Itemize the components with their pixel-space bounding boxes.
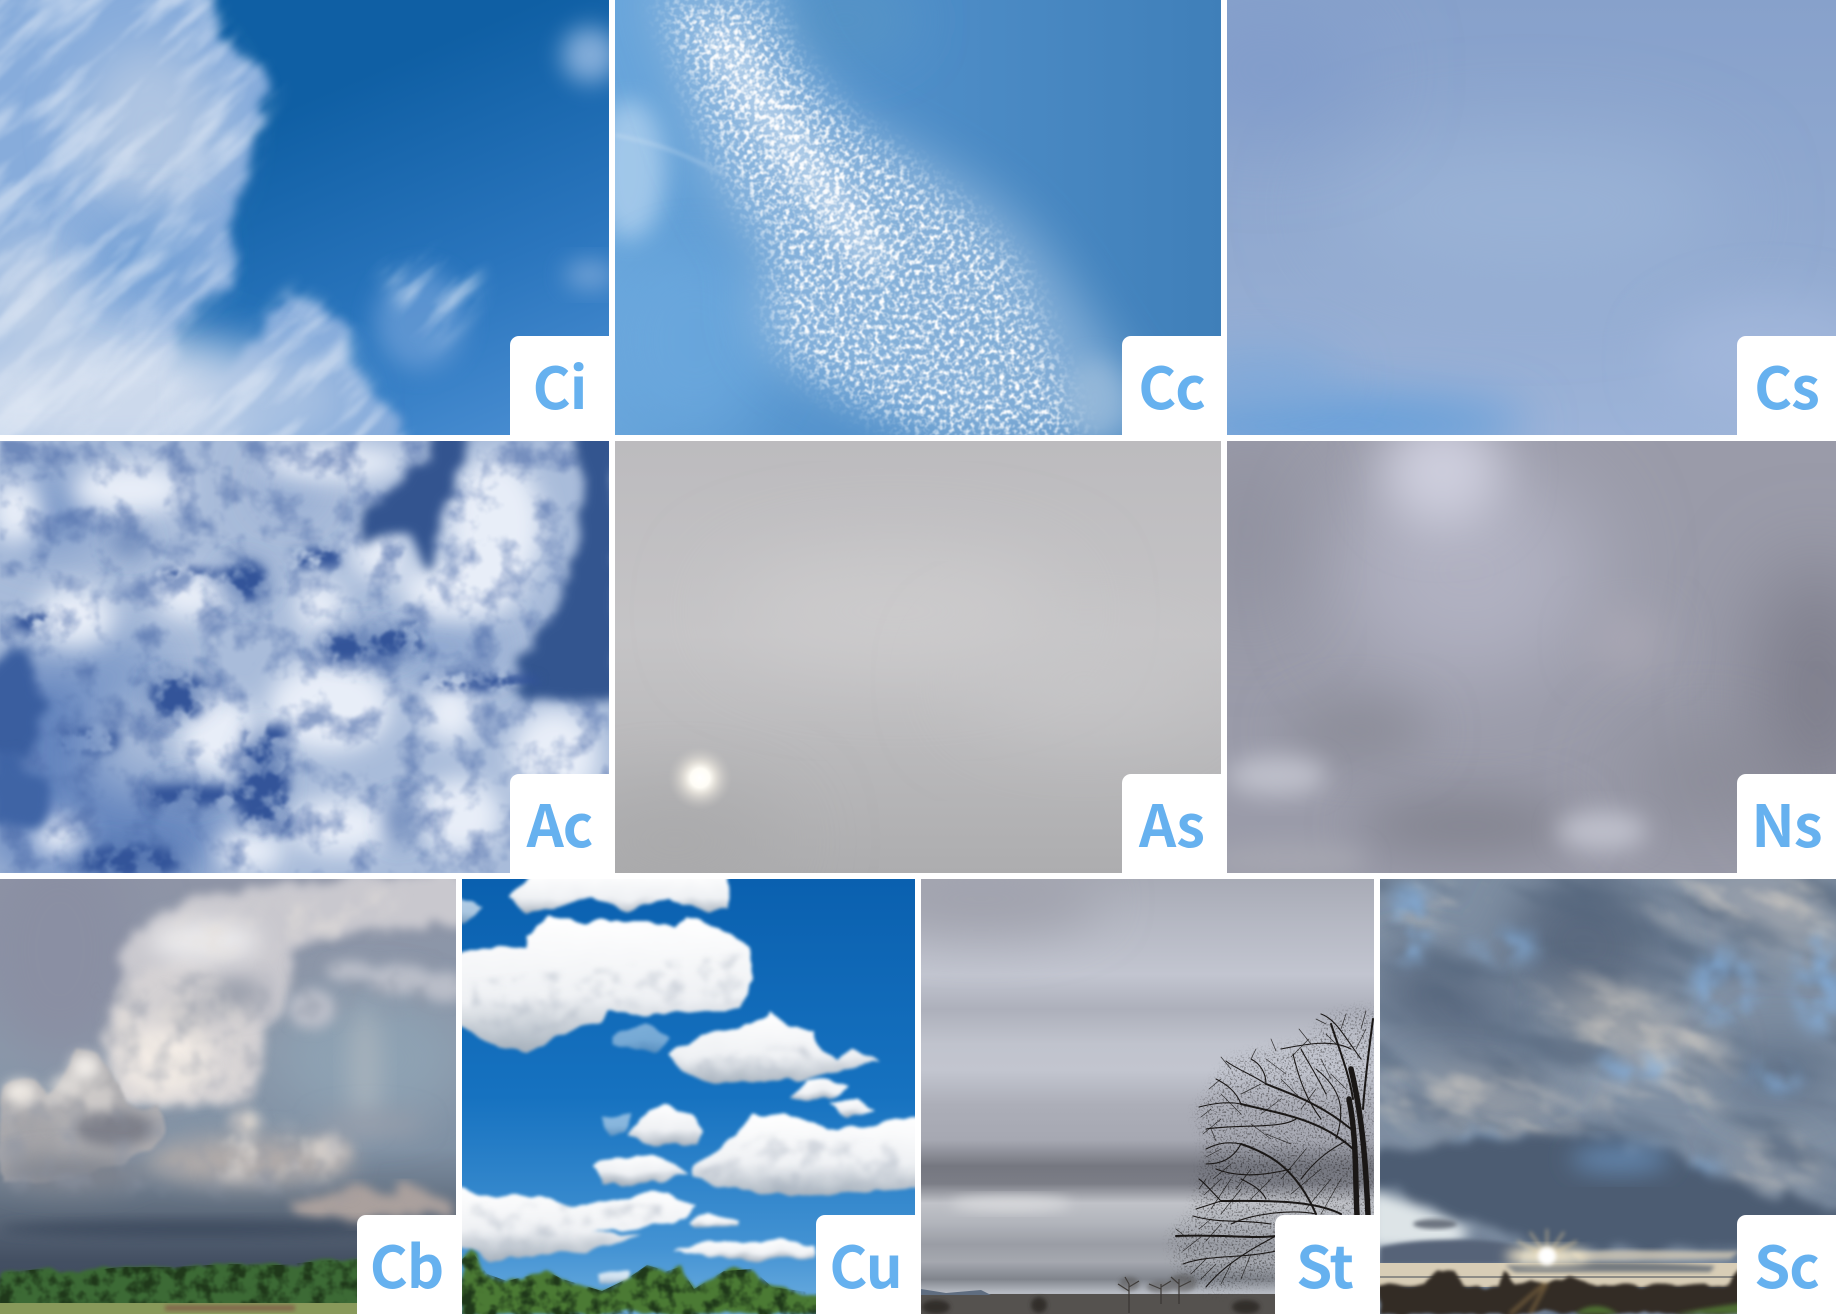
- label: Cs: [1737, 336, 1836, 435]
- label: Cc: Cc: [1138, 342, 1205, 426]
- label: As: [1122, 774, 1221, 873]
- panel: Cs cirrostratus: [1227, 0, 1836, 435]
- ground: green hillside: [1575, 1302, 1750, 1314]
- label: Cu: Cu: [829, 1221, 902, 1305]
- panel: Cc cirrocumulus: [615, 0, 1221, 435]
- clouds: soft internal shading: [472, 954, 902, 1254]
- photo: towering cumulonimbus over treeline: [0, 879, 456, 1314]
- label: Ac: Ac: [527, 780, 592, 864]
- label: Ci: Ci: [533, 342, 586, 426]
- photo: banded grey stratus with bare tree: [921, 879, 1374, 1314]
- label: St: [1275, 1215, 1374, 1314]
- trees: leafy treetops: [462, 1251, 915, 1314]
- photo: smooth veil of cirrostratus: [1227, 0, 1836, 435]
- clouds: dark band low in the sky: [1360, 1133, 1836, 1252]
- icon: sun with rays: [1505, 1229, 1589, 1265]
- label: St: St: [1296, 1221, 1353, 1305]
- panel: St stratus: [921, 879, 1374, 1314]
- panel: Cu cumulus: [462, 879, 915, 1314]
- clouds: horizon stripes: [1380, 1250, 1836, 1287]
- ground: distant tree band: [921, 1294, 1374, 1314]
- photo: grey altostratus with dim sun: [615, 441, 1221, 873]
- label: As: As: [1139, 780, 1204, 864]
- photo: dark rain-bearing nimbostratus: [1227, 441, 1836, 873]
- trees: dark treeline at sunset: [1380, 1269, 1836, 1314]
- label: Sc: Sc: [1754, 1221, 1819, 1305]
- photo: wispy cirrus on deep blue sky: [0, 0, 609, 435]
- clouds: fine cauliflower shading: [0, 959, 456, 1199]
- panel: Ns nimbostratus: [1227, 441, 1836, 873]
- label: Ns: [1737, 774, 1836, 873]
- label: Ac: [510, 774, 609, 873]
- label: Sc: [1737, 1215, 1836, 1314]
- panel: Sc stratocumulus: [1380, 879, 1836, 1314]
- label: Cb: [357, 1215, 456, 1314]
- label: Cc: [1122, 336, 1221, 435]
- label: Cb: Cb: [370, 1221, 443, 1305]
- icon: hazy sun disc: [668, 746, 732, 810]
- label: Cs: Cs: [1754, 342, 1819, 426]
- photo: fair-weather cumulus over treetops: [462, 879, 915, 1314]
- label: Ns: Ns: [1751, 780, 1822, 864]
- label: Cu: [816, 1215, 915, 1314]
- photo: stratocumulus at sunset with sunburst: [1380, 879, 1836, 1314]
- panel: Ac altocumulus: [0, 441, 609, 873]
- tree: large bare tree silhouette: [1171, 1009, 1374, 1291]
- panel: Ci cirrus: [0, 0, 609, 435]
- panel: Cb cumulonimbus: [0, 879, 456, 1314]
- label: Ci: [510, 336, 609, 435]
- panel: As altostratus: [615, 441, 1221, 873]
- tree: small bare trees on the horizon: [1118, 1277, 1191, 1313]
- photo: rippled cirrocumulus band diagonal across blue sky: [615, 0, 1221, 435]
- trees: distant treeline: [0, 1259, 456, 1314]
- photo: patchy altocumulus on deep blue: [0, 441, 609, 873]
